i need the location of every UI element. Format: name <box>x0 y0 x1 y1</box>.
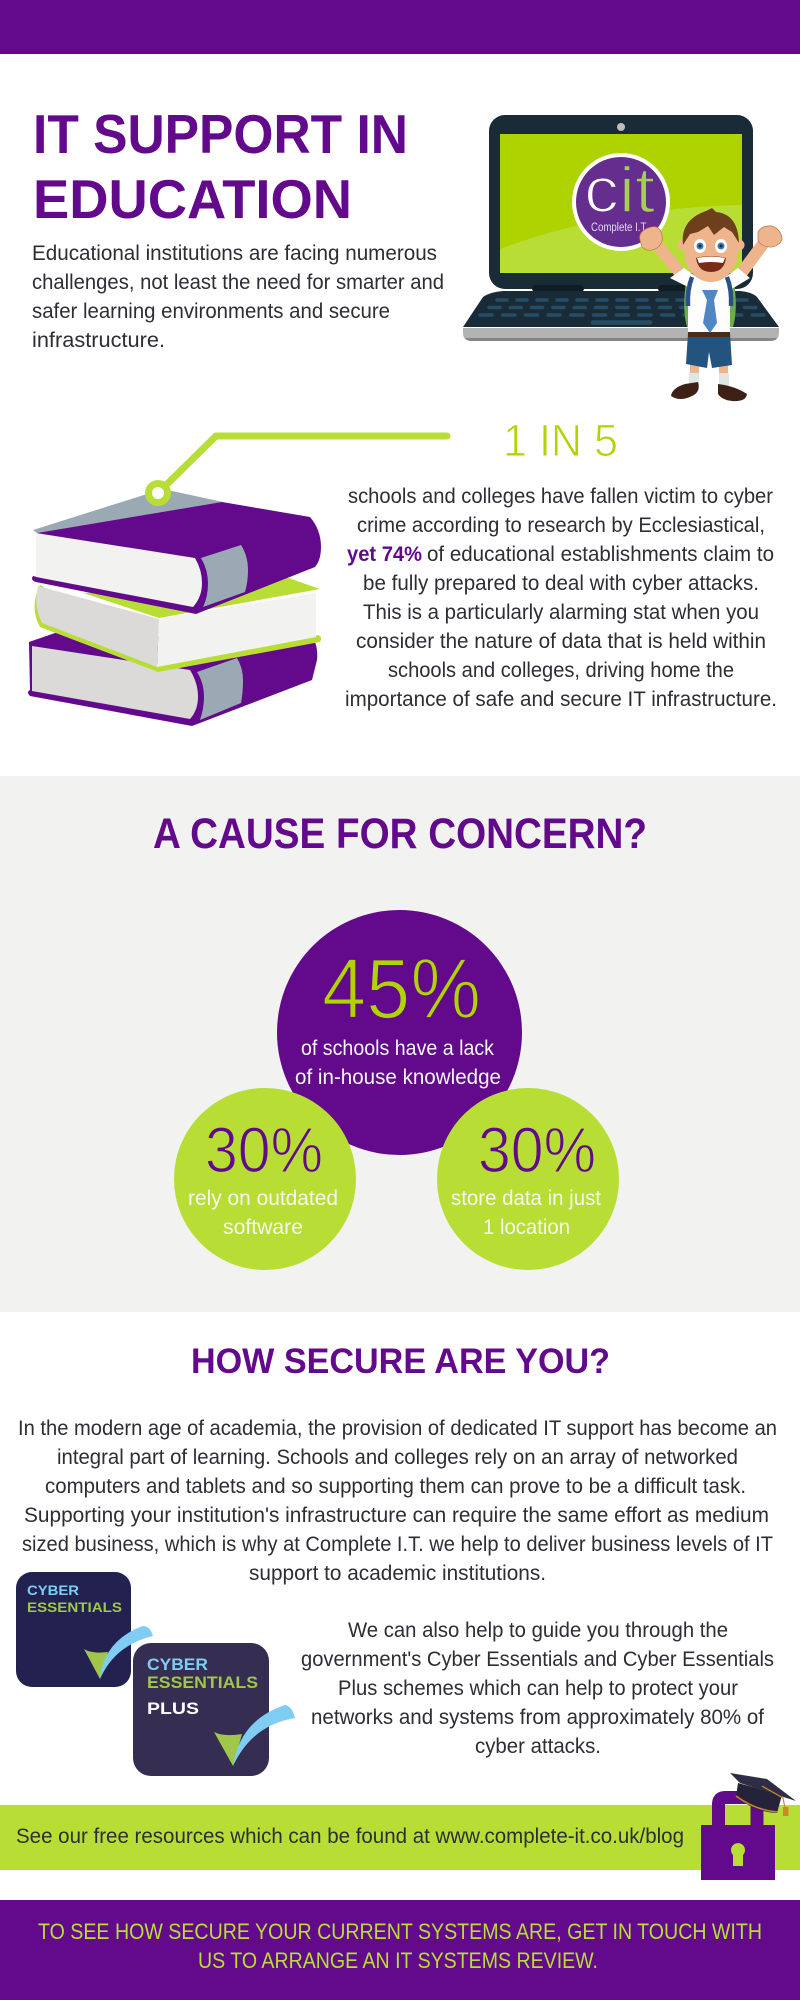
circle: 45 percent: of schools have a lack <box>301 1037 494 1060</box>
tie <box>702 290 718 333</box>
badge: cyber essentials plus: ESSENTIALS <box>147 1673 258 1692</box>
intro text: safer learning environments and secure <box>32 300 390 323</box>
heading: A CAUSE FOR CONCERN? <box>153 810 647 858</box>
ecclesiastical research text: importance of safe and secure IT infrastructure. <box>345 688 777 711</box>
circle: 30 percent one location: store data in just <box>451 1187 601 1210</box>
badge: cyber essentials plus: PLUS <box>147 1699 199 1718</box>
ecclesiastical research text: consider the nature of data that is held within <box>356 630 766 653</box>
circle: 30 percent one location <box>437 1088 619 1270</box>
head <box>684 220 738 282</box>
text: dedicated it support: computers and tablets and so supporting them can prove to be a difficult task. <box>45 1475 746 1498</box>
text: dedicated it support: Supporting your institution's infrastructure can require the same effort as medium <box>24 1504 769 1527</box>
badge: cyber essentials: ESSENTIALS <box>27 1599 122 1615</box>
shorts <box>686 333 732 368</box>
text: cyber essentials schemes <box>301 1619 774 1758</box>
text: dedicated it support <box>18 1417 777 1585</box>
title: IT SUPPORT IN <box>33 103 408 165</box>
belt <box>688 332 730 337</box>
circle: 45 percent: 45% <box>322 942 481 1037</box>
green resources band <box>0 1805 800 1870</box>
camera <box>617 123 625 131</box>
circle: 30 percent one location: 30% <box>478 1114 596 1186</box>
laptop base <box>463 291 779 327</box>
title: EDUCATION <box>33 168 352 230</box>
hair <box>683 208 739 245</box>
laptop lid <box>489 115 753 289</box>
text: cyber essentials schemes: We can also help to guide you through the <box>348 1619 728 1642</box>
heading: how secure are you: HOW SECURE ARE YOU? <box>191 1342 610 1381</box>
badge: cyber essentials plus <box>133 1643 295 1776</box>
text: dedicated it support: integral part of learning. Schools and colleges rely on an array of networked <box>57 1446 738 1469</box>
text: cyber essentials schemes: Plus schemes which can help to protect your <box>338 1677 738 1700</box>
laptop screen <box>500 134 742 273</box>
laptop silver edge <box>463 328 779 341</box>
mouth <box>696 256 726 272</box>
resources text: See our free resources which can be found at www.complete-it.co.uk/blog <box>16 1825 684 1848</box>
bottom book <box>28 633 317 726</box>
statistic: 1 in 5: 1 IN 5 <box>503 415 618 466</box>
ecclesiastical research text: be fully prepared to deal with cyber attacks. <box>363 572 759 595</box>
shirt <box>670 268 750 333</box>
badge: cyber essentials plus: CYBER <box>147 1655 208 1674</box>
top bar <box>0 0 800 54</box>
icon: padlock <box>701 1798 775 1880</box>
ecclesiastical research text: crime according to research by Ecclesiastical, <box>357 514 765 537</box>
ears <box>678 240 744 250</box>
socks <box>689 373 729 386</box>
text: cyber essentials schemes: cyber attacks. <box>475 1735 601 1758</box>
ecclesiastical research text: schools and colleges have fallen victim to cyber <box>348 485 773 508</box>
callout line with ring <box>158 436 447 493</box>
logo: cit <box>572 153 670 251</box>
fists <box>640 226 782 250</box>
logo: cit: Complete I.T. <box>591 222 648 234</box>
laptop feet <box>532 285 710 292</box>
ecclesiastical research text: of educational establishments claim to <box>427 543 774 566</box>
arms <box>653 240 766 275</box>
backpack straps <box>688 277 731 306</box>
ecclesiastical research text <box>345 485 777 711</box>
text: dedicated it support: support to academic institutions. <box>249 1562 546 1585</box>
badge: cyber essentials: CYBER <box>27 1582 79 1598</box>
circle: 30 percent outdated software: 30% <box>205 1114 323 1186</box>
text: dedicated it support: In the modern age of academia, the provision of dedicated IT support has become an <box>18 1417 777 1440</box>
ecclesiastical research text: This is a particularly alarming stat when you <box>363 601 759 624</box>
shoes <box>671 382 747 401</box>
text: dedicated it support: sized business, which is why at Complete I.T. we help to deliver business levels of IT <box>22 1533 773 1556</box>
intro text: challenges, not least the need for smarter and <box>32 271 444 294</box>
circle: 30 percent outdated software <box>174 1088 356 1270</box>
text: cyber essentials schemes: government's Cyber Essentials and Cyber Essentials <box>301 1648 774 1671</box>
circle: 30 percent one location: 1 location <box>483 1216 570 1239</box>
ecclesiastical research text: yet 74% <box>347 543 422 566</box>
eyes <box>694 239 727 253</box>
middle book <box>34 576 321 672</box>
circle: 30 percent outdated software: rely on outdated <box>188 1187 338 1210</box>
badge: cyber essentials <box>16 1572 153 1687</box>
footer bar <box>0 1900 800 2000</box>
icon: graduation cap <box>730 1773 796 1816</box>
panel background <box>0 776 800 1312</box>
keyboard keys <box>480 300 764 322</box>
panel: a cause for concern <box>0 776 800 1312</box>
circle: 45 percent: of in-house knowledge <box>295 1066 501 1089</box>
call to action <box>38 1919 762 1973</box>
icon: book stack <box>28 484 321 726</box>
logo: cit: c <box>584 154 619 226</box>
keyhole <box>731 1843 745 1866</box>
call to action: US TO ARRANGE AN IT SYSTEMS REVIEW. <box>198 1948 598 1973</box>
icon: laptop <box>463 115 779 341</box>
circle: 30 percent outdated software: software <box>223 1216 303 1239</box>
intro text <box>32 242 444 352</box>
legs <box>690 364 728 374</box>
backpack <box>684 282 736 327</box>
logo: cit: it <box>619 154 655 226</box>
icon: cheering boy <box>640 208 782 401</box>
title <box>33 103 408 230</box>
text: cyber essentials schemes: networks and systems from approximately 80% of <box>311 1706 764 1729</box>
top book <box>32 491 321 614</box>
ring <box>148 484 168 502</box>
intro text: Educational institutions are facing numerous <box>32 242 437 265</box>
intro text: infrastructure. <box>32 329 165 352</box>
circle: 45 percent <box>277 910 522 1155</box>
ecclesiastical research text: schools and colleges, driving home the <box>388 659 734 682</box>
